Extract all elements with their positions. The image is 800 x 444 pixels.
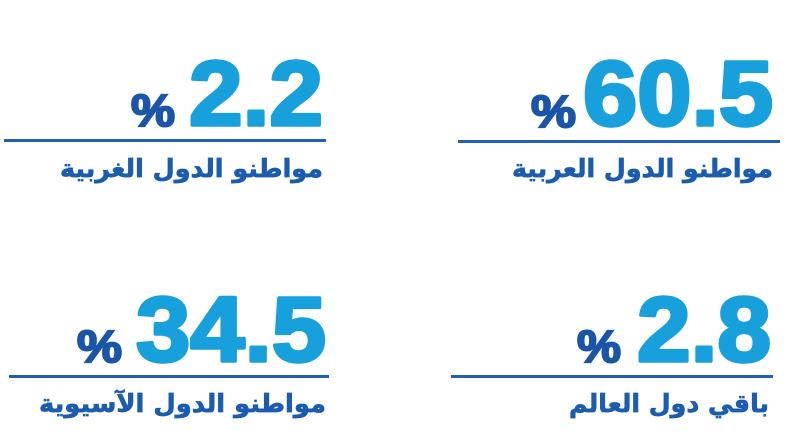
rule <box>4 139 326 142</box>
panel: Western citizens <box>4 43 326 184</box>
percent sign: % <box>77 321 122 372</box>
panel: Asian citizens <box>9 279 329 419</box>
value: 34.5: 34.5 <box>136 279 326 381</box>
rule <box>458 140 780 143</box>
percent sign: % <box>577 321 621 372</box>
label: مواطنو الدول العربية <box>512 154 773 184</box>
value: 60.5: 60.5 <box>583 43 773 145</box>
label: مواطنو الدول الغربية <box>60 154 323 184</box>
value: 2.8: 2.8 <box>637 279 771 381</box>
percent sign: % <box>531 86 576 137</box>
panel: rest of the world <box>451 279 773 419</box>
label: باقي دول العالم <box>569 389 769 419</box>
percent sign: % <box>131 85 175 136</box>
rule <box>451 375 773 378</box>
rule <box>9 375 329 378</box>
value: 2.2: 2.2 <box>189 43 323 145</box>
panel: Arab citizens <box>458 43 780 184</box>
label: مواطنو الدول الآسيوية <box>39 389 326 419</box>
